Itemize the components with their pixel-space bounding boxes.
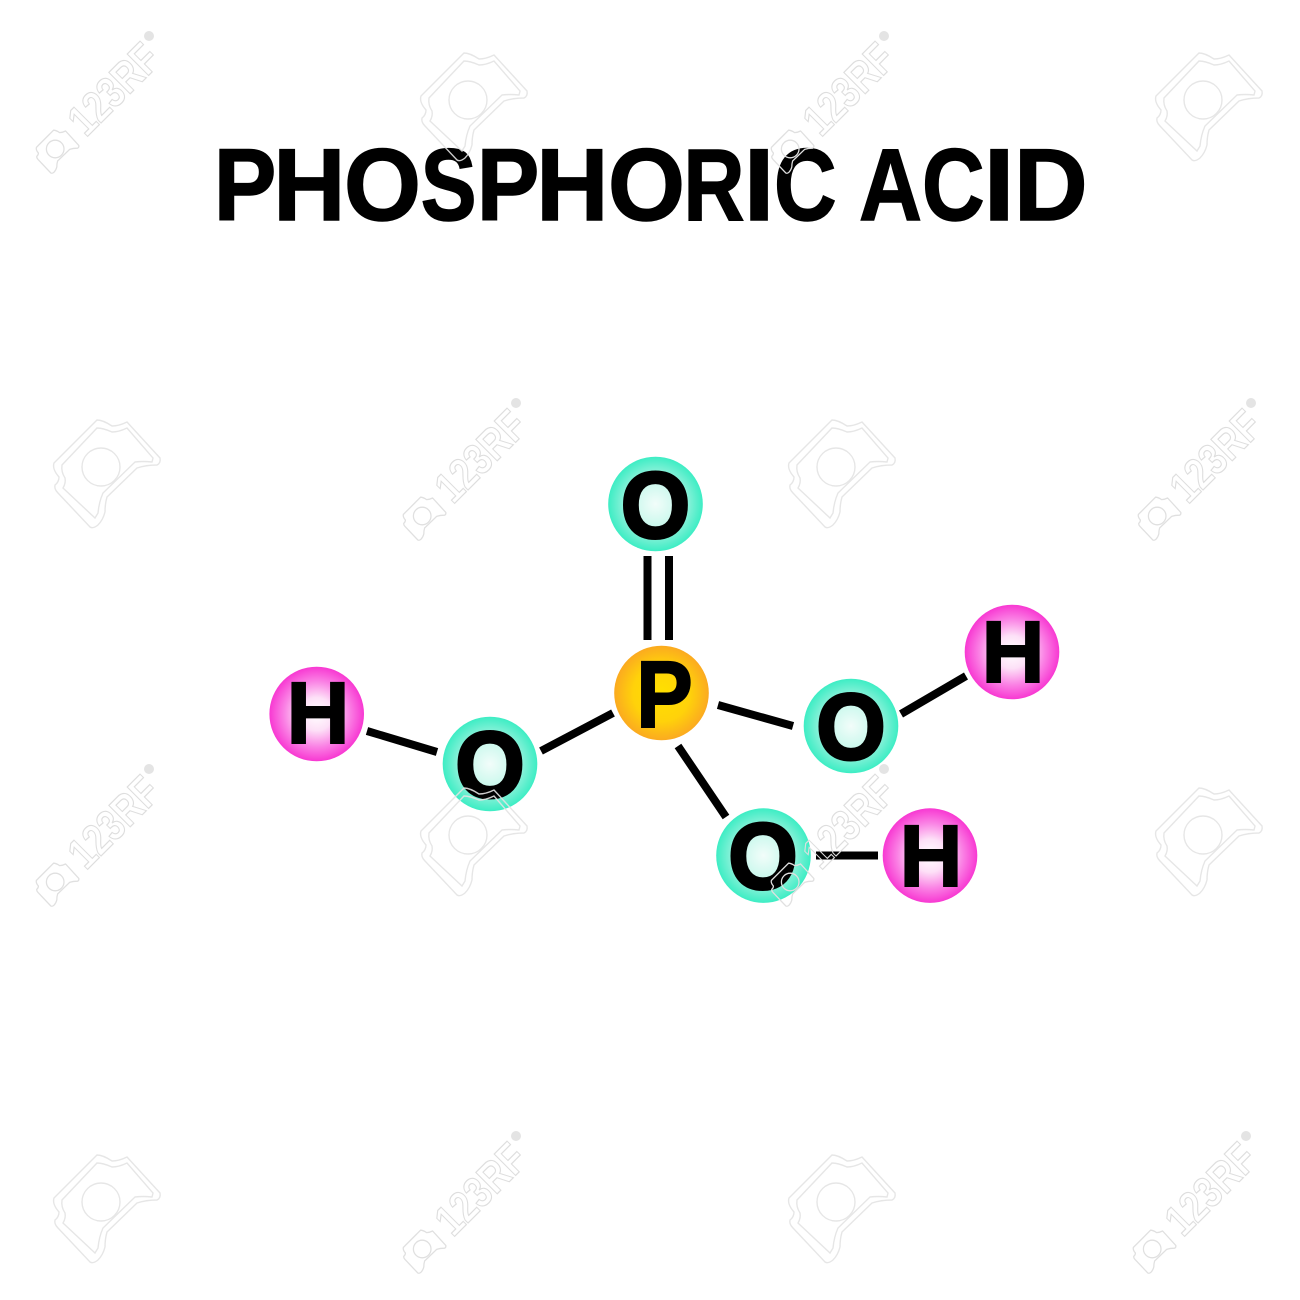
title: A xyxy=(859,129,922,243)
atom: right hydrogen xyxy=(965,604,1059,701)
title: O xyxy=(608,129,685,242)
watermark logo 6: 123RF xyxy=(793,767,904,878)
watermark logo 3: 123RF xyxy=(425,401,536,512)
title: D xyxy=(1014,128,1088,242)
title: C xyxy=(774,128,837,243)
title: S xyxy=(421,128,477,242)
atom: left hydrogen xyxy=(269,665,364,762)
bond: P to left O xyxy=(541,713,613,751)
atom: lower oxygen: O xyxy=(728,804,798,909)
watermark logo 6 xyxy=(771,764,904,906)
atom: top oxygen: O xyxy=(621,453,690,558)
title: C xyxy=(922,128,985,243)
title: I xyxy=(744,127,774,242)
bond: right O to H xyxy=(901,676,966,714)
atom: phosphorus xyxy=(614,642,709,748)
title: P xyxy=(214,127,276,242)
atom: right hydrogen: H xyxy=(982,604,1044,701)
atom: lower hydrogen: H xyxy=(900,808,962,905)
title: R xyxy=(683,128,745,242)
watermark logo 7 xyxy=(403,1131,536,1273)
bond: P to right O xyxy=(718,705,793,726)
watermark logo 4: 123RF xyxy=(1160,401,1271,512)
title: P xyxy=(477,127,539,242)
bond: left O to H xyxy=(367,731,437,752)
title: H xyxy=(273,129,345,242)
watermark logo 7: 123RF xyxy=(425,1134,536,1245)
double bond: P=O xyxy=(648,556,669,640)
atom: phosphorus: P xyxy=(636,642,693,748)
title xyxy=(214,127,1088,243)
title: I xyxy=(984,127,1014,242)
atom: left oxygen: O xyxy=(455,713,525,818)
watermark logo 3 xyxy=(403,398,536,540)
watermark logo 2: 123RF xyxy=(793,34,904,145)
bond: P to lower O xyxy=(678,746,726,817)
atom: lower hydrogen xyxy=(883,808,977,905)
title: H xyxy=(536,129,608,242)
watermark logo 8 xyxy=(1133,1131,1266,1273)
watermark logo 1: 123RF xyxy=(58,34,169,145)
watermark logo 1 xyxy=(36,31,169,173)
watermark logo 5 xyxy=(36,764,169,906)
atom: left hydrogen: H xyxy=(287,665,349,762)
molecule diagram xyxy=(269,453,1059,909)
watermark logo 2 xyxy=(771,31,904,173)
bond: lower O to H xyxy=(816,852,878,860)
title: O xyxy=(344,129,421,242)
watermark logo 4 xyxy=(1138,398,1271,540)
watermark logo 5: 123RF xyxy=(58,767,169,878)
atom: right oxygen: O xyxy=(816,675,886,780)
watermark logo 8: 123RF xyxy=(1155,1134,1266,1245)
